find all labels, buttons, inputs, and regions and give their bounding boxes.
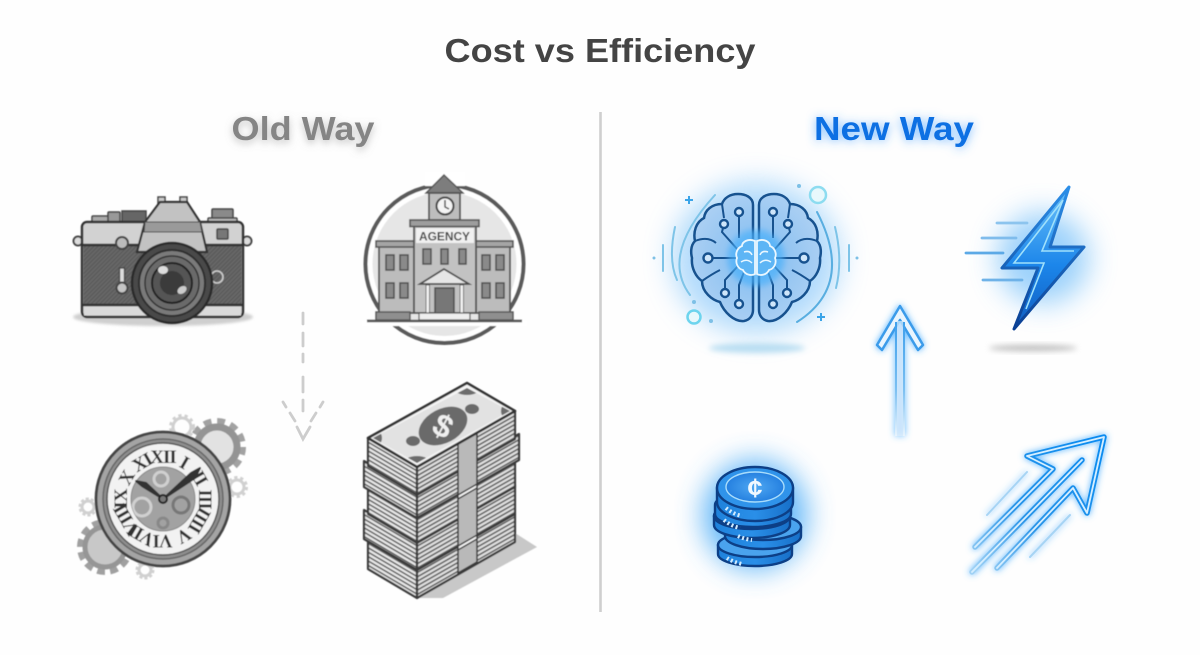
clock numerals: IX: [111, 488, 132, 509]
top banknote: [364, 381, 519, 470]
clock numerals: VII: [125, 519, 159, 550]
icon: lightning bolt: [966, 187, 1089, 352]
clock numerals: II: [187, 467, 212, 490]
icon: stack of cash: [364, 381, 537, 598]
icon: agency building: [362, 172, 527, 343]
clock numerals: XII: [150, 447, 176, 468]
paper strap: [458, 433, 477, 573]
clock numerals: III: [194, 489, 215, 509]
clock numerals: VI: [153, 530, 173, 551]
coin edge reeding: [724, 508, 752, 564]
brain left hemisphere: [691, 194, 753, 321]
title: Cost vs Efficiency: [444, 32, 756, 69]
panel: new way: [652, 110, 1104, 572]
cash bundle 3: [368, 461, 515, 543]
heading: new way: New Way: [814, 110, 975, 147]
icon: AI brain: [652, 182, 858, 353]
brain right hemisphere: [759, 194, 821, 321]
clock numerals: V: [172, 523, 195, 548]
arrow: dashed downward: [283, 313, 323, 439]
cash bundle 4: [364, 485, 515, 570]
cash bundle 5: [368, 514, 515, 598]
clock numerals: VIII: [110, 500, 144, 539]
clock numerals: X: [115, 466, 140, 489]
clock numerals: I: [176, 452, 192, 474]
clock numerals: [110, 447, 215, 551]
arrow: neon up: [877, 306, 923, 436]
infographic canvas: [72, 38, 1112, 612]
arrow: neon diagonal growth: [972, 437, 1104, 572]
heading: old way: Old Way: [232, 110, 375, 147]
clock numerals: XI: [129, 449, 156, 477]
panel: old way: [73, 110, 537, 598]
divider: [599, 112, 602, 612]
gear: lower left: [81, 523, 129, 571]
central glowing mini brain: [728, 230, 784, 286]
icon: blue coin stack: ¢: [747, 473, 763, 503]
top banknote: $: [427, 406, 459, 446]
cash bundle 1: [368, 411, 515, 495]
icon: clock with gears: [80, 416, 246, 578]
icon: blue coin stack: [703, 460, 807, 570]
icon: agency building: AGENCY: [419, 230, 470, 244]
cash bundle 2: [364, 434, 519, 518]
icon: film camera: [73, 197, 253, 326]
gear: upper right: [192, 422, 242, 472]
clock numerals: IIII: [183, 503, 214, 537]
